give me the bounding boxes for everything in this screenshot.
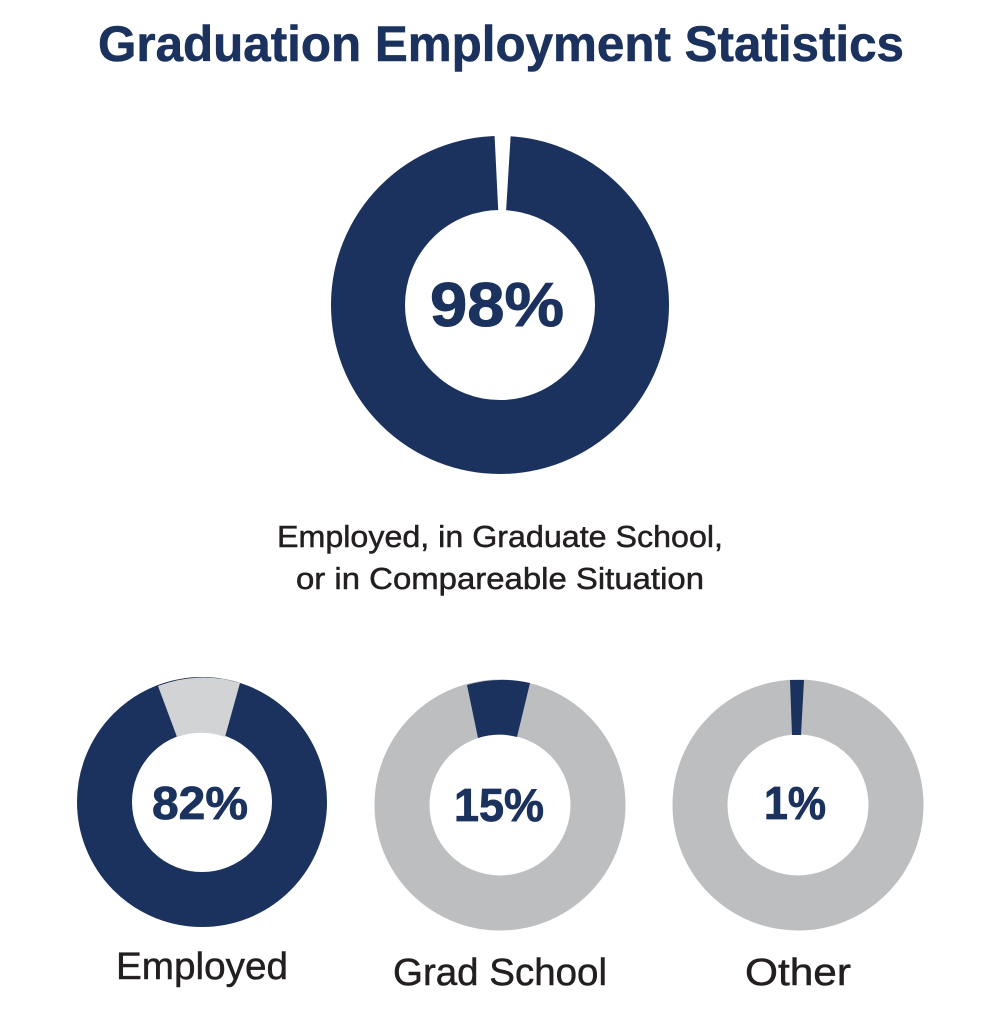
label: grad school: Grad School — [393, 952, 607, 994]
label: other: Other — [745, 952, 851, 994]
label: employed: Employed — [116, 946, 288, 988]
main donut caption: Employed, in Graduate School, — [277, 519, 723, 554]
main donut chart: 98% — [368, 130, 632, 437]
other value: 1% — [764, 777, 826, 829]
employed value: 82% — [152, 777, 248, 829]
donut chart: other 1% — [700, 680, 896, 903]
grad school value: 15% — [454, 779, 544, 831]
donut chart: grad school 15% — [402, 680, 598, 903]
main donut value: 98% — [430, 271, 564, 340]
donut chart: employed 82% — [104, 677, 300, 900]
main donut caption: or in Compareable Situation — [296, 561, 704, 596]
title: Graduation Employment Statistics — [98, 16, 904, 72]
main donut caption — [277, 519, 723, 596]
